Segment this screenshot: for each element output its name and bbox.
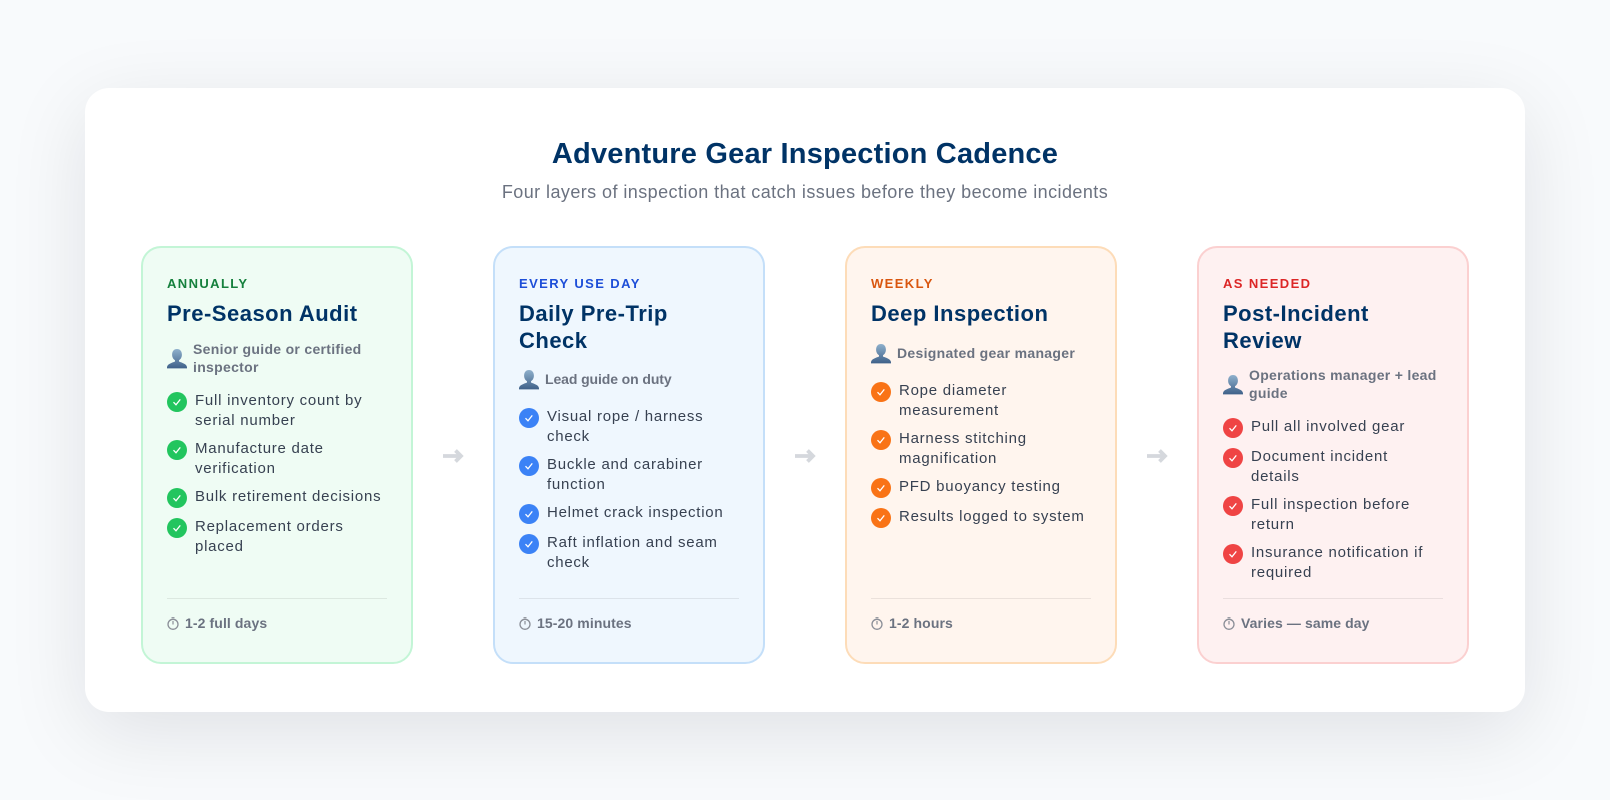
checklist item: Raft inflation and seam — [547, 534, 718, 551]
checklist item: Pull all involved gear — [1251, 418, 1405, 435]
checklist item: check — [547, 554, 590, 571]
owner: inspector — [193, 359, 259, 375]
duration: 15-20 minutes — [537, 615, 632, 631]
checklist item — [167, 518, 344, 555]
checklist item — [519, 408, 703, 445]
checklist item: Full inventory count by — [195, 392, 362, 409]
arrow — [795, 449, 816, 463]
panel: Post-Incident Review — [1197, 246, 1469, 664]
checklist item: Full inspection before — [1251, 496, 1410, 513]
frequency label: ANNUALLY — [167, 276, 249, 291]
checklist item: Harness stitching — [899, 430, 1027, 447]
card heading — [519, 301, 668, 353]
owner: guide — [1249, 385, 1288, 401]
owner: Lead guide on duty — [545, 371, 672, 387]
card heading: Daily Pre-Trip — [519, 301, 668, 326]
subtitle: Four layers of inspection that catch issues before they become incidents — [502, 182, 1108, 202]
checklist item — [167, 440, 324, 477]
owner: Operations manager + lead — [1249, 367, 1437, 383]
checklist item: check — [547, 428, 590, 445]
frequency label: EVERY USE DAY — [519, 276, 641, 291]
checklist item: Rope diameter — [899, 382, 1007, 399]
card heading: Deep Inspection — [871, 301, 1048, 326]
owner: Senior guide or certified — [193, 341, 362, 357]
checklist item — [519, 456, 703, 493]
owner — [167, 341, 362, 375]
checklist item: measurement — [899, 402, 999, 419]
checklist item — [1223, 544, 1423, 581]
duration: Varies — same day — [1241, 615, 1370, 631]
frequency label: WEEKLY — [871, 276, 934, 291]
checklist item: Bulk retirement decisions — [195, 488, 381, 505]
card heading: Review — [1223, 328, 1302, 353]
checklist item — [1223, 448, 1388, 485]
checklist item: required — [1251, 564, 1312, 581]
checklist item: verification — [195, 460, 276, 477]
panel: Daily Pre-Trip Check — [493, 246, 765, 664]
checklist item: function — [547, 476, 606, 493]
panel: Pre-Season Audit — [141, 246, 413, 664]
owner — [519, 370, 672, 390]
checklist item: Visual rope / harness — [547, 408, 703, 425]
arrow — [443, 449, 464, 463]
checklist item — [871, 382, 1007, 419]
checklist item: magnification — [899, 450, 997, 467]
checklist item — [871, 430, 1027, 467]
panel: Deep Inspection — [845, 246, 1117, 664]
checklist item: Document incident — [1251, 448, 1388, 465]
owner — [1223, 367, 1437, 401]
checklist item: serial number — [195, 412, 296, 429]
arrow — [1147, 449, 1168, 463]
checklist item: Manufacture date — [195, 440, 324, 457]
checklist item — [1223, 496, 1410, 533]
owner: Designated gear manager — [897, 345, 1075, 361]
checklist item: details — [1251, 468, 1300, 485]
checklist item: Replacement orders — [195, 518, 344, 535]
card heading: Post-Incident — [1223, 301, 1369, 326]
panel: main white card — [85, 88, 1525, 712]
checklist item: Results logged to system — [899, 508, 1085, 525]
card heading: Check — [519, 328, 588, 353]
duration: 1-2 full days — [185, 615, 267, 631]
card heading: Pre-Season Audit — [167, 301, 358, 326]
card heading — [1223, 301, 1369, 353]
checklist item: placed — [195, 538, 244, 555]
checklist item — [519, 534, 718, 571]
checklist item: PFD buoyancy testing — [899, 478, 1061, 495]
checklist item — [167, 392, 362, 429]
duration: 1-2 hours — [889, 615, 953, 631]
checklist item: Insurance notification if — [1251, 544, 1423, 561]
checklist item: Helmet crack inspection — [547, 504, 723, 521]
checklist item: Buckle and carabiner — [547, 456, 703, 473]
frequency label: AS NEEDED — [1223, 276, 1311, 291]
checklist item: return — [1251, 516, 1295, 533]
title: Adventure Gear Inspection Cadence — [552, 138, 1058, 170]
